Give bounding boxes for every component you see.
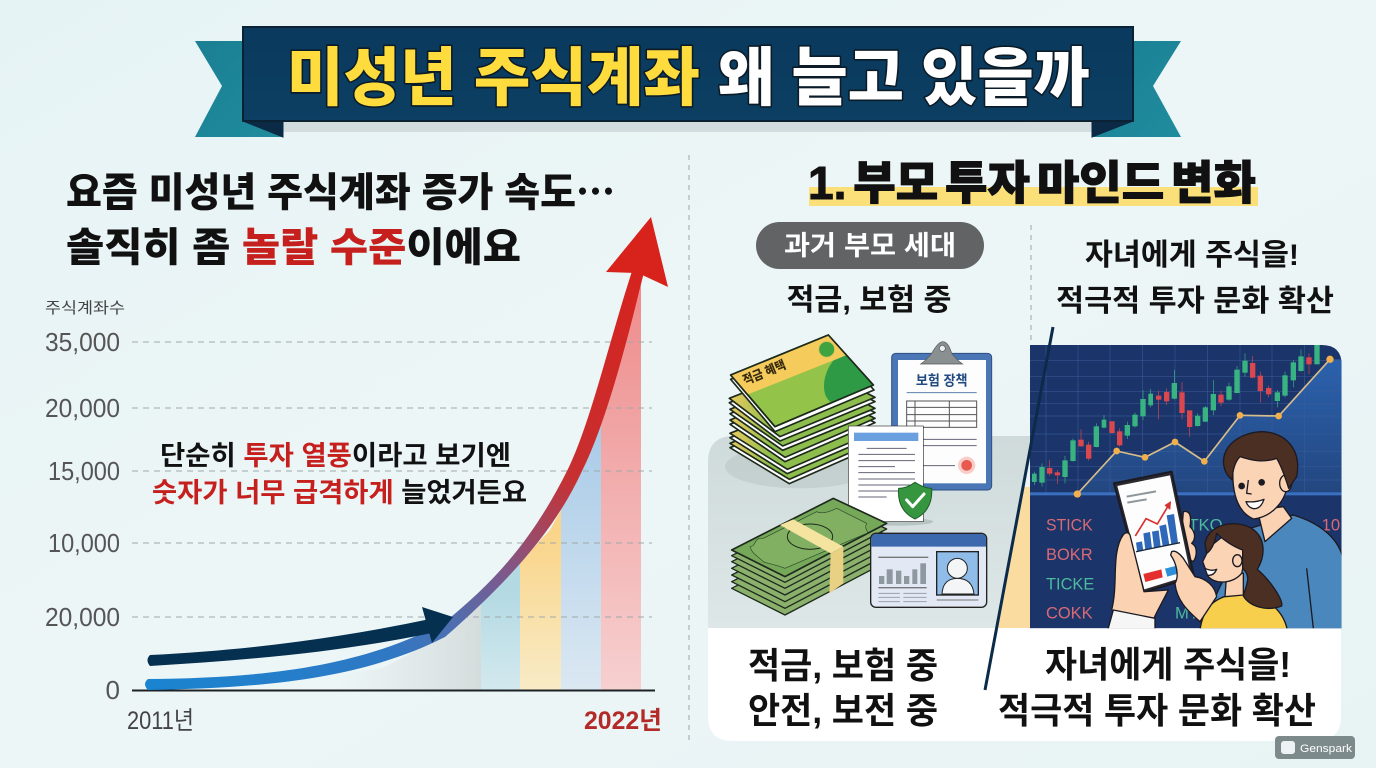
ticker labels: MT (1175, 604, 1199, 623)
ticker labels: TICKE (1046, 574, 1094, 593)
line chart (1074, 356, 1334, 498)
past generation pill: 과거 부모 세대 (784, 231, 956, 261)
left heading: 솔직히 좀 놀랄 수준이에요 (66, 226, 521, 270)
icon: document with shield (848, 426, 933, 526)
watermark (1275, 736, 1355, 759)
growth chart: 2022년 (584, 707, 662, 735)
bottom left caption (748, 645, 938, 731)
past generation pill (756, 222, 984, 269)
past generation caption: 적금, 보험 중 (786, 284, 952, 317)
grey shade under curve (340, 600, 481, 690)
ticker labels: BOKR (1046, 545, 1093, 564)
child figure (1200, 524, 1287, 630)
chart callout: 단순히 투자 열풍이라고 보기엔 (160, 441, 511, 471)
bottom left caption: 안전, 보전 중 (748, 690, 938, 731)
x axis labels: 2011년 (127, 707, 194, 735)
y axis labels: 20,000 (45, 393, 120, 423)
children caption: 적극적 투자 문화 확산 (1056, 285, 1334, 318)
ticker labels: STICK (1046, 516, 1093, 535)
bottom right caption: 자녀에게 주식을! (1045, 644, 1291, 685)
candlesticks red (1047, 353, 1311, 484)
icon: account card with chart (871, 533, 987, 607)
ticker labels: COKK (1046, 604, 1093, 623)
left heading: 요즘 미성년 주식계좌 증가 속도… (66, 160, 615, 218)
icon: stack of savings cards: 적금 혜택 (741, 357, 788, 388)
ticker labels: TKO (1188, 516, 1223, 535)
rising red arrow (145, 217, 668, 690)
grey table background (708, 436, 1034, 628)
y axis labels: 35,000 (45, 327, 120, 357)
bottom right caption: 적극적 투자 문화 확산 (998, 690, 1316, 731)
icon: insurance clipboard: 보험 장책 (916, 373, 967, 390)
left heading (66, 160, 615, 270)
children caption: 자녀에게 주식을! (1085, 239, 1299, 272)
right heading: 1. 부모 투자 마인드 변화 (808, 157, 1256, 209)
slanted divider line (985, 327, 1053, 690)
title text (287, 42, 1090, 114)
bottom right caption (998, 644, 1316, 731)
right ribbon tail (1092, 41, 1181, 137)
chart callout: 숫자가 너무 급격하게 늘었거든요 (152, 478, 527, 508)
icon: insurance clipboard (892, 342, 992, 490)
ticker labels (1046, 516, 1340, 623)
grid lines (132, 342, 652, 617)
y axis labels (45, 327, 120, 705)
y axis labels: 10,000 (48, 528, 120, 558)
x axis (132, 690, 655, 692)
peach strip (996, 487, 1030, 628)
bottom left caption: 적금, 보험 중 (748, 645, 938, 686)
line chart area (1077, 359, 1342, 494)
phone with hands (1107, 472, 1217, 632)
bottom white panel (708, 628, 1341, 741)
illustration: parent and child with stock chart (1030, 340, 1343, 632)
icon: stack of cash (732, 498, 887, 615)
chart background (1030, 345, 1342, 628)
children caption (1056, 239, 1334, 318)
y axis labels: 0 (106, 675, 120, 705)
candlesticks green (1032, 340, 1319, 487)
left ribbon tail (195, 41, 283, 137)
y axis title: 주식계좌수 (45, 299, 125, 317)
growth chart (45, 217, 668, 735)
y axis labels: 20,000 (45, 602, 120, 632)
bars (481, 285, 641, 690)
icon: stack of savings cards (725, 335, 875, 488)
title text: 왜 늘고 있을까 (718, 42, 1090, 114)
ticker labels: 10 (1322, 516, 1340, 535)
chart callout (152, 441, 527, 508)
illustration: savings and insurance items (725, 335, 992, 615)
y axis labels: 15,000 (48, 456, 120, 486)
parent figure (1200, 432, 1343, 630)
watermark: Genspark (1300, 743, 1353, 755)
dark navy arrow (148, 607, 453, 666)
title banner (195, 27, 1181, 137)
title text: 미성년 주식계좌 (287, 42, 700, 114)
banner body (243, 27, 1133, 121)
